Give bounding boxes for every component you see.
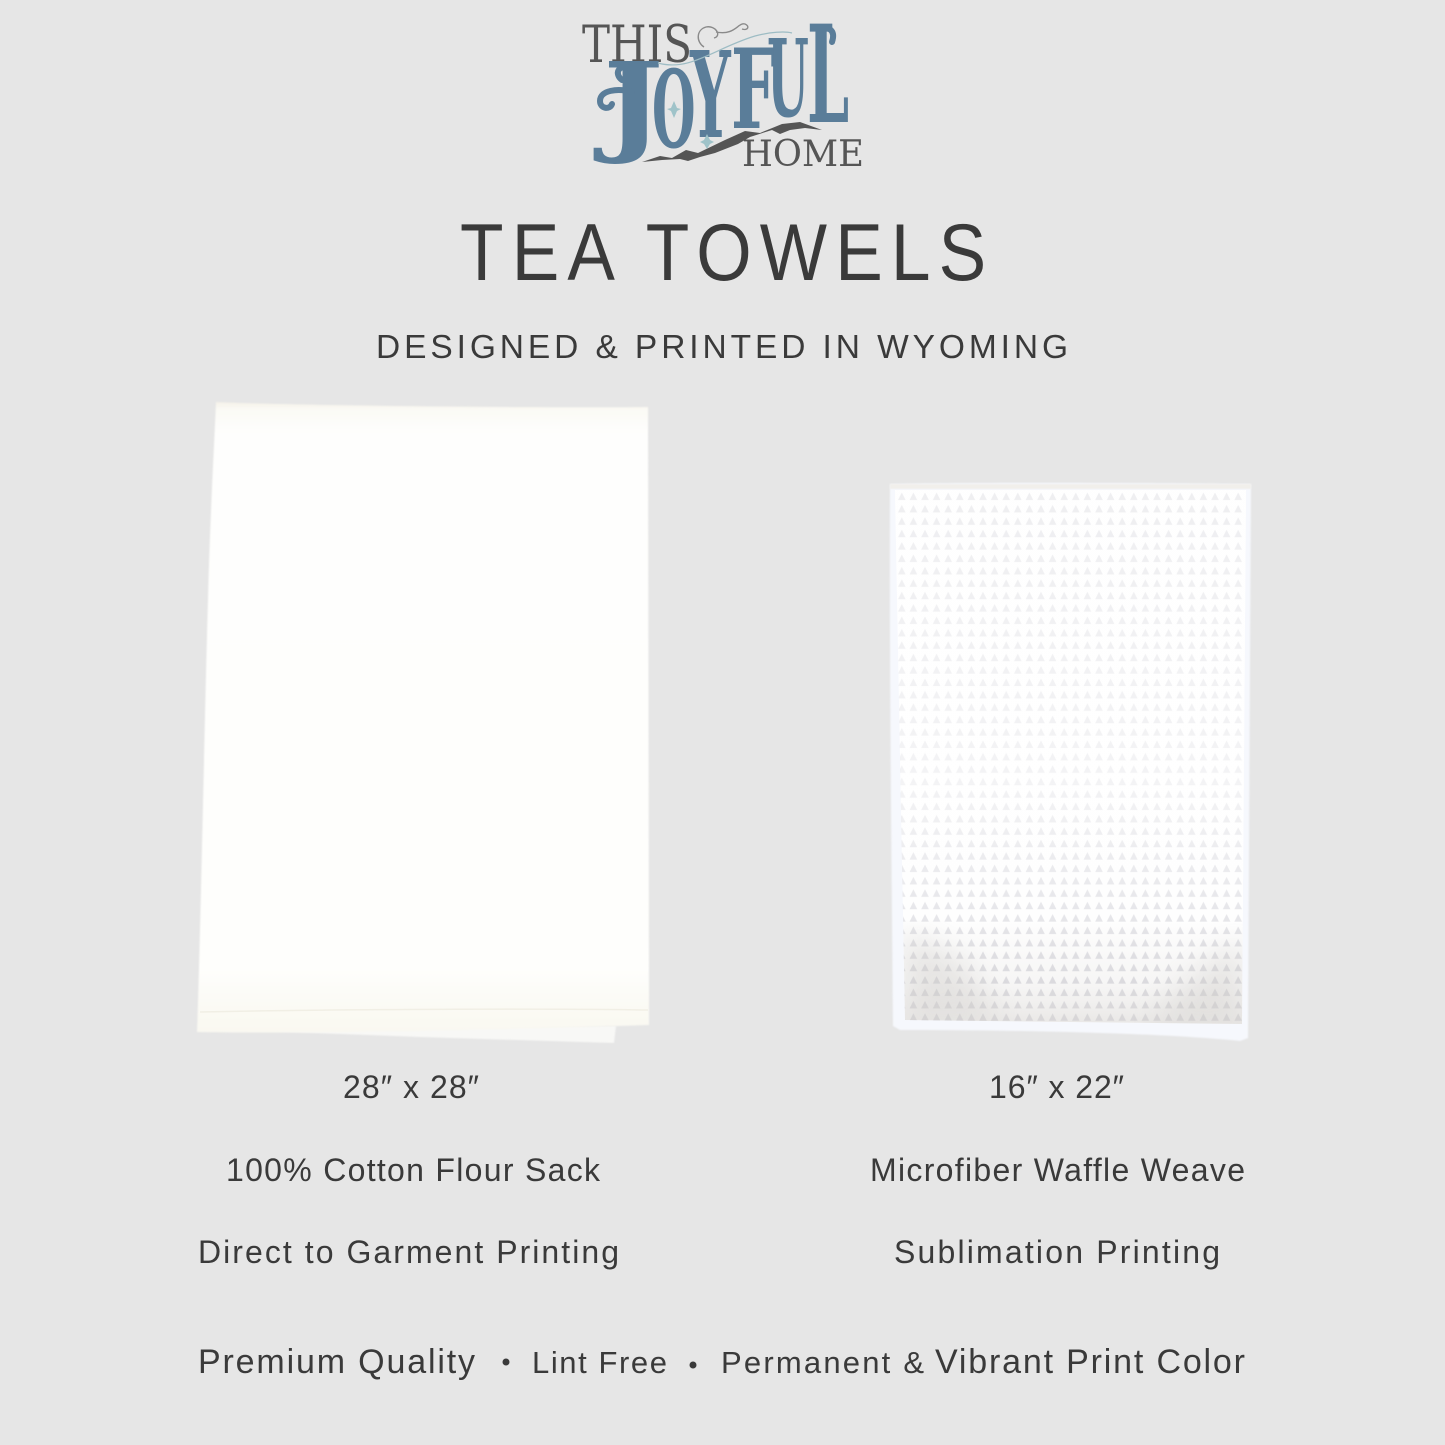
printing: Direct to Garment Printing	[198, 1234, 619, 1270]
feature: premium quality: Premium Quality	[198, 1343, 475, 1381]
logo word: JOYFUL: F	[731, 25, 776, 155]
logo word: HOME: HOME	[742, 134, 864, 175]
towel: lower shading	[904, 938, 1242, 1020]
logo diamonds	[667, 101, 714, 149]
panel: waffle weave towel	[890, 483, 1251, 1041]
feature line	[198, 1343, 1245, 1381]
panel: flour sack towel	[197, 402, 649, 1043]
feature: permanent: Permanent &	[721, 1345, 924, 1380]
material: 100% Cotton Flour Sack	[226, 1152, 601, 1188]
feature: lint free: Lint Free	[532, 1345, 667, 1380]
logo word: JOYFUL: O	[652, 47, 696, 173]
logo word: JOYFUL: L	[807, 0, 849, 154]
feature: vibrant print color: Vibrant Print Color	[935, 1343, 1245, 1381]
logo ornaments: letter curls	[600, 28, 833, 108]
logo word: THIS: THIS	[582, 16, 692, 75]
towel: waffle border	[890, 483, 1251, 1041]
subtitle: DESIGNED & PRINTED IN WYOMING	[376, 329, 1068, 366]
bullet	[502, 1358, 510, 1366]
logo: This Joyful Home	[582, 0, 864, 175]
size: 28″ x 28″	[343, 1069, 479, 1105]
material: Microfiber Waffle Weave	[870, 1152, 1245, 1188]
towel: back fold layer	[235, 1026, 616, 1043]
logo word: JOYFUL	[593, 0, 849, 173]
logo word: JOYFUL: J	[593, 39, 664, 168]
title: TEA TOWELS	[460, 208, 986, 298]
towel: waffle weave body	[895, 490, 1246, 1024]
towel: flour sack body	[197, 402, 649, 1033]
right towel specs	[870, 1069, 1245, 1270]
logo word: JOYFUL: Y	[689, 26, 732, 166]
bullet	[690, 1362, 696, 1368]
logo mountains	[642, 122, 822, 162]
printing: Sublimation Printing	[894, 1234, 1220, 1270]
left towel specs	[198, 1069, 619, 1270]
logo swirl	[658, 24, 792, 65]
size: 16″ x 22″	[989, 1069, 1124, 1105]
logo word: JOYFUL: U	[767, 15, 809, 142]
